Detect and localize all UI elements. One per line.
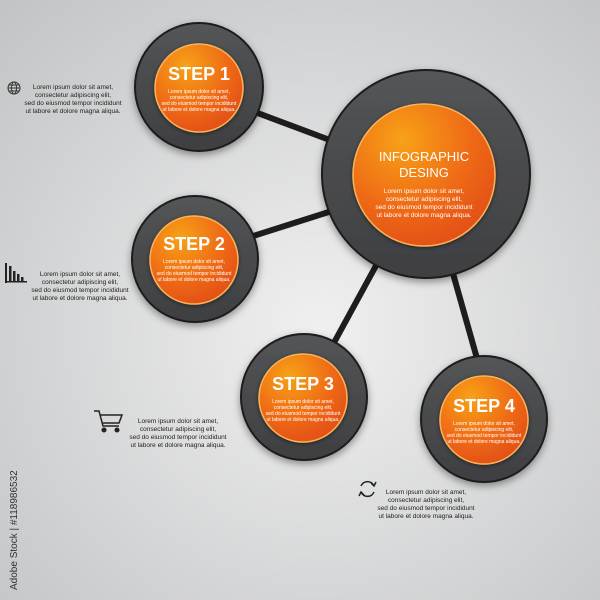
text block 2 [31, 271, 129, 302]
text block 2: ut labore et dolore magna aliqua. [32, 295, 128, 302]
step 3 circle: STEP 3 [272, 374, 334, 394]
text block 2: Lorem ipsum dolor sit amet, [40, 271, 120, 278]
text block 1: consectetur adipiscing elit, [35, 92, 111, 99]
step 1 circle: consectetur adipiscing elit, [170, 95, 228, 101]
text block 4 [377, 489, 475, 520]
text block 2: sed do eiusmod tempor incididunt [31, 287, 129, 294]
icon: refresh [359, 482, 376, 496]
step 1 circle: STEP 1 [168, 64, 230, 84]
text block 3: ut labore et dolore magna aliqua. [130, 442, 226, 449]
main circle: DESING [399, 165, 449, 180]
icon: bar chart [5, 263, 27, 283]
main circle: consectetur adipiscing elit, [386, 196, 462, 203]
icon: cart [94, 411, 122, 432]
text block 4: Lorem ipsum dolor sit amet, [386, 489, 466, 496]
main circle: INFOGRAPHIC [379, 149, 469, 164]
step 1 circle: sed do eiusmod tempor incididunt [162, 101, 237, 107]
step 3 circle: Lorem ipsum dolor sit amet, [272, 399, 334, 405]
text block 3: consectetur adipiscing elit, [140, 426, 216, 433]
text block 3: sed do eiusmod tempor incididunt [129, 434, 227, 441]
step 4 circle: ut labore et dolore magna aliqua. [447, 439, 521, 445]
step 1 circle: Lorem ipsum dolor sit amet, [168, 89, 230, 95]
text block 1 [24, 84, 122, 115]
step 4 circle: Lorem ipsum dolor sit amet, [453, 421, 515, 427]
main circle: Lorem ipsum dolor sit amet, [384, 188, 464, 195]
step 2 circle: Lorem ipsum dolor sit amet, [163, 259, 225, 265]
text block 3 [129, 418, 227, 449]
text block 4: consectetur adipiscing elit, [388, 497, 464, 504]
text block 4: ut labore et dolore magna aliqua. [378, 513, 474, 520]
main circle: ut labore et dolore magna aliqua. [376, 212, 472, 219]
text block 1: ut labore et dolore magna aliqua. [25, 108, 121, 115]
connector lines [250, 112, 478, 362]
step 3 circle: ut labore et dolore magna aliqua. [266, 417, 340, 423]
step 2 circle: consectetur adipiscing elit, [165, 265, 223, 271]
step 4 circle: STEP 4 [453, 396, 515, 416]
step 4 circle: sed do eiusmod tempor incididunt [447, 433, 522, 439]
text block 2: consectetur adipiscing elit, [42, 279, 118, 286]
step 2 circle: STEP 2 [163, 234, 225, 254]
main circle: sed do eiusmod tempor incididunt [375, 204, 473, 211]
main circle [322, 70, 530, 278]
step 2 circle: ut labore et dolore magna aliqua. [157, 277, 231, 283]
text block 3: Lorem ipsum dolor sit amet, [138, 418, 218, 425]
text block 1: Lorem ipsum dolor sit amet, [33, 84, 113, 91]
step 4 circle: consectetur adipiscing elit, [455, 427, 513, 433]
step 2 circle: sed do eiusmod tempor incididunt [157, 271, 232, 277]
step 3 circle: sed do eiusmod tempor incididunt [266, 411, 341, 417]
step 3 circle: consectetur adipiscing elit, [274, 405, 332, 411]
text block 1: sed do eiusmod tempor incididunt [24, 100, 122, 107]
text block 4: sed do eiusmod tempor incididunt [377, 505, 475, 512]
step 2 circle [132, 196, 258, 322]
watermark id: Adobe Stock | #118986532 [9, 470, 20, 590]
step 3 circle [241, 334, 367, 460]
step 1 circle [135, 23, 263, 151]
icon: globe [8, 82, 20, 94]
step 4 circle [421, 356, 547, 482]
step 1 circle: ut labore et dolore magna aliqua. [162, 107, 236, 113]
